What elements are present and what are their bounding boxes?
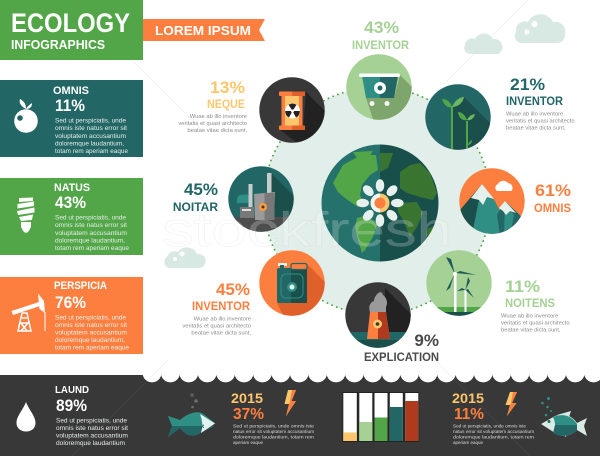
stat: 2015 11%: Sed ut perspiciatis, unde omnis iste [453, 424, 527, 428]
stat: 2015 11%: aperiam eaque [453, 440, 484, 445]
stat: 11% noitens: veritatis et quasi architecto [501, 320, 570, 326]
stat: 43% inventor [352, 18, 409, 52]
icon: factory [228, 166, 296, 235]
panel: omnis: OMNIS [53, 85, 89, 97]
stat: 2015 37%: doloremque laudantium, totam rem [233, 434, 314, 440]
title banner: ECOLOGY [11, 8, 130, 38]
stat: 9% explication: EXPLICATION [364, 350, 439, 364]
stat: 21% inventor: beatae vitae dicta sunt, [506, 126, 566, 132]
stat: 13% neque [178, 78, 247, 134]
stat: 2015 37%: 37% [233, 406, 264, 423]
stat: 45% inventor: veritatis et quasi architecto [182, 324, 251, 330]
panel: natus [0, 178, 143, 255]
central pale disc with dotted ring [264, 88, 490, 314]
icon: water drop [16, 402, 36, 432]
stat: 61% omnis [534, 181, 571, 215]
panel: omnis: totam rem aperiam eaque [55, 148, 128, 155]
stat: 43% inventor: INVENTOR [352, 38, 409, 52]
stat: 45% inventor: beatae vitae dicta sunt, [191, 330, 251, 336]
stat: 21% inventor: veritatis et quasi architecto [506, 118, 575, 124]
stat: 9% explication [364, 331, 439, 364]
stat: 13% neque: Wuae ab illo inventore [190, 114, 247, 120]
ribbon heading: LOREM IPSUM [155, 23, 251, 38]
stat: 11% noitens: 11% [505, 277, 540, 296]
panel: natus: voluptatem accusantium [55, 230, 127, 237]
panel: omnis: omnis iste natus error sit [55, 125, 127, 132]
stat: 2015 37%: aperiam eaque [233, 440, 264, 445]
stat: 45% inventor: INVENTOR [192, 299, 250, 313]
stat: 45% inventor: 45% [216, 280, 250, 299]
icon: light bulb [17, 198, 34, 233]
stat: 2015 37%: Sed ut perspiciatis, unde omnis iste [233, 424, 315, 428]
icon: cloud large [515, 14, 565, 43]
stat: 2015 37%: natus error sit voluptatem accusantium [233, 429, 314, 434]
icon: fuel canister [259, 250, 325, 316]
panel: laund [16, 384, 128, 447]
icon: nuclear plant tower [345, 282, 415, 350]
panel: omnis: Sed ut perspiciatis, unde [55, 118, 126, 124]
icon: recycling bin [346, 54, 412, 120]
stat: 45% inventor [182, 280, 251, 336]
panel: perspicia [0, 277, 143, 354]
title banner [0, 0, 143, 60]
icon: lightning bolt right [506, 392, 517, 416]
stat: 13% neque: 13% [210, 78, 245, 97]
stat: 21% inventor [506, 75, 575, 132]
stat: 2015 11%: 11% [454, 406, 484, 423]
icon: radioactive barrel [259, 77, 325, 143]
stat: 45% noitar: 45% [184, 180, 218, 199]
panel: laund: voluptatem accusantium [56, 432, 128, 440]
icon: dead fish [168, 393, 215, 437]
icon: mountains [459, 168, 525, 235]
icon: apple [14, 99, 38, 133]
stat: 11% noitens: NOITENS [505, 296, 555, 310]
stat: 2015 37%: 2015 [231, 391, 264, 406]
panel: natus: 43% [55, 194, 86, 212]
stat: 61% omnis: 61% [535, 181, 571, 200]
panel: natus: NATUS [54, 182, 90, 194]
panel: omnis: doloremque laudantium, [55, 140, 124, 148]
icon: cloud left [164, 247, 206, 268]
icon: wind turbines [424, 250, 494, 319]
panel: laund: doloremque laudantium [56, 440, 125, 447]
stat: 9% explication: 9% [414, 331, 439, 350]
panel: laund: LAUND [55, 384, 89, 396]
panel: natus: omnis iste natus error sit [55, 222, 127, 229]
stat: 45% inventor: Wuae ab illo inventore [194, 316, 251, 322]
title banner: INFOGRAPHICS [11, 37, 105, 52]
panel: perspicia: voluptatem accusantium [55, 330, 127, 336]
panel: natus: totam rem aperiam eaque [55, 245, 129, 252]
stat: 2015 11%: natus error sit voluptatem accusantium [453, 429, 534, 434]
panel: perspicia: 76% [55, 294, 86, 312]
panel: perspicia: doloremque laudantium, [55, 337, 125, 344]
stat: 45% noitar: NOITAR [173, 200, 218, 214]
stat: 2015 37% [231, 391, 315, 445]
icon: oil pump [12, 294, 46, 331]
bar chart [343, 392, 419, 442]
icon: sprouts [425, 84, 491, 150]
stat: 43% inventor: 43% [364, 18, 399, 37]
stat: 21% inventor: INVENTOR [506, 94, 563, 108]
ribbon heading [143, 19, 265, 41]
icon: cloud small [464, 33, 502, 54]
stat: 11% noitens [501, 277, 570, 334]
watermark: stockfresh [162, 204, 452, 257]
panel: omnis [0, 80, 143, 157]
panel: laund: omnis iste natus error sit [56, 425, 128, 432]
panel: natus: Sed ut perspiciatis, unde [55, 214, 126, 222]
stat: 13% neque: NEQUE [207, 97, 245, 111]
panel: perspicia: PERSPICIA [54, 280, 107, 292]
stat: 21% inventor: 21% [510, 75, 545, 94]
icon: healthy fish [541, 397, 587, 437]
panel: laund: Sed ut perspiciatis, unde [56, 418, 127, 424]
stat: 13% neque: beatae vitae dicta sunt, [187, 128, 247, 134]
stat: 13% neque: veritatis et quasi architecto [178, 121, 247, 127]
icon: globe with flower [322, 144, 440, 262]
panel: perspicia: Sed ut perspiciatis, unde [55, 314, 126, 322]
panel: laund: 89% [56, 397, 87, 415]
stat: 11% noitens: beatae vitae dicta sunt, [501, 328, 561, 334]
footer band [0, 360, 600, 456]
panel: omnis: 11% [55, 97, 85, 115]
stat: 2015 11%: 2015 [452, 391, 485, 406]
stat: 21% inventor: Wuae ab illo inventore [506, 112, 563, 118]
stat: 2015 11%: doloremque laudantium, totam rem [453, 434, 534, 440]
panel: omnis: voluptatem accusantium [55, 133, 126, 140]
flower [356, 179, 404, 227]
stat: 2015 11% [452, 391, 534, 445]
panel: perspicia: omnis iste natus error sit [55, 322, 127, 329]
panel: natus: doloremque laudantium, [55, 238, 125, 244]
icon: dead fish: x [201, 424, 205, 430]
panel: perspicia: totam rem aperiam eaque [55, 344, 129, 352]
stat: 45% noitar [173, 180, 218, 214]
icon: lightning bolt [284, 390, 296, 416]
stat: 61% omnis: OMNIS [534, 201, 571, 215]
stat: 11% noitens: Wuae ab illo inventore [501, 314, 558, 320]
